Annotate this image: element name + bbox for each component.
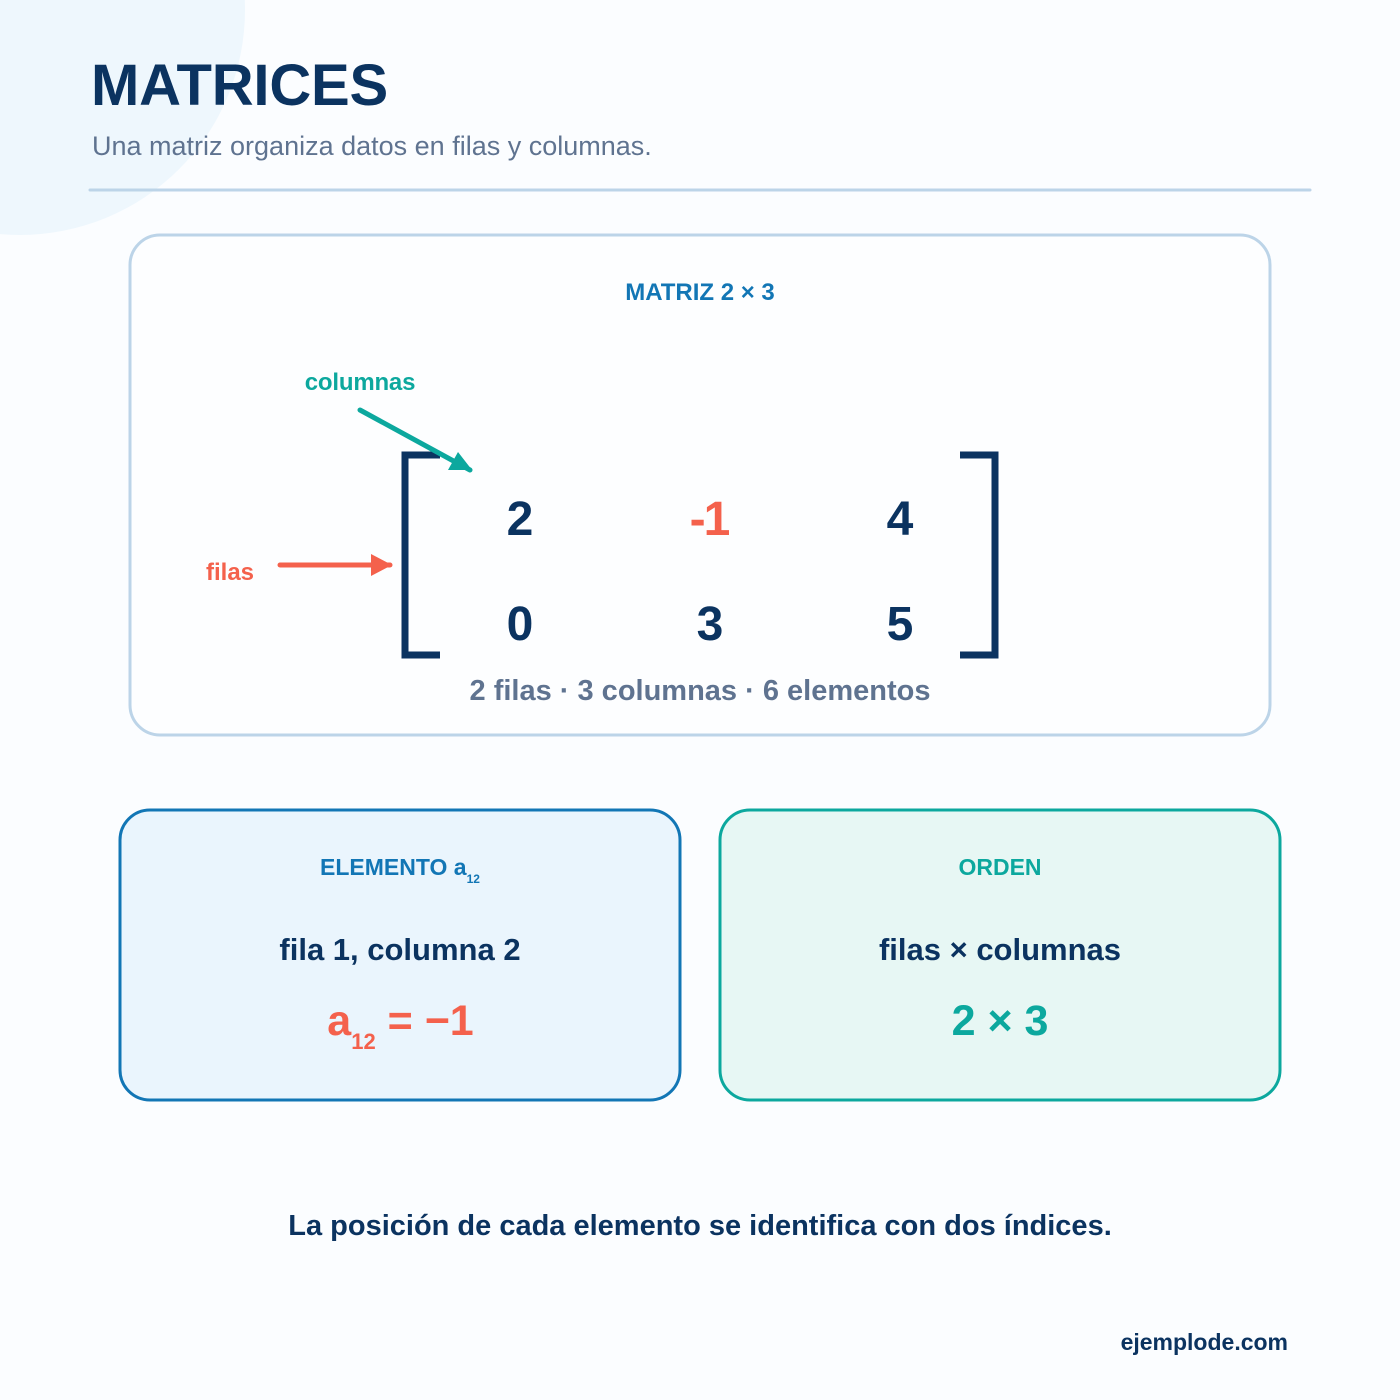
matrix summary: 2 filas · 3 columnas · 6 elementos: [470, 675, 930, 707]
panel: orden: [720, 810, 1280, 1100]
matrix values: 0: [507, 598, 533, 651]
card heading: 12: [467, 872, 480, 886]
matrix values: -1: [690, 493, 730, 546]
footer: ejemplode.com: [1121, 1329, 1288, 1355]
card heading: ELEMENTO a: [320, 854, 467, 880]
card formula: 2 × 3: [952, 997, 1048, 1045]
panel heading: MATRIZ 2 × 3: [625, 279, 775, 306]
card formula: a: [327, 997, 351, 1045]
card heading: ORDEN: [958, 854, 1042, 880]
arrow: filas: [280, 554, 392, 576]
card formula: = −1: [376, 997, 474, 1045]
matrix values: [507, 493, 914, 651]
matrix values: 5: [887, 598, 913, 651]
conclusion: La posición de cada elemento se identifica con dos índices.: [288, 1210, 1112, 1242]
label: columnas: columnas: [305, 369, 415, 396]
left bracket: [405, 455, 440, 655]
panel: elemento a12: [120, 810, 680, 1100]
title: MATRICES: [91, 53, 388, 118]
matrix values: 2: [507, 493, 533, 546]
panel: matriz 2 × 3: [130, 235, 1270, 735]
right bracket: [960, 455, 995, 655]
matrix values: 3: [697, 598, 723, 651]
arrow: columnas: [360, 410, 472, 470]
card text: filas × columnas: [879, 932, 1121, 967]
card text: fila 1, columna 2: [279, 932, 521, 967]
subtitle: Una matriz organiza datos en filas y columnas.: [92, 131, 652, 161]
matrix values: 4: [887, 493, 914, 546]
label: filas: filas: [206, 559, 254, 586]
card formula: 12: [351, 1029, 376, 1054]
